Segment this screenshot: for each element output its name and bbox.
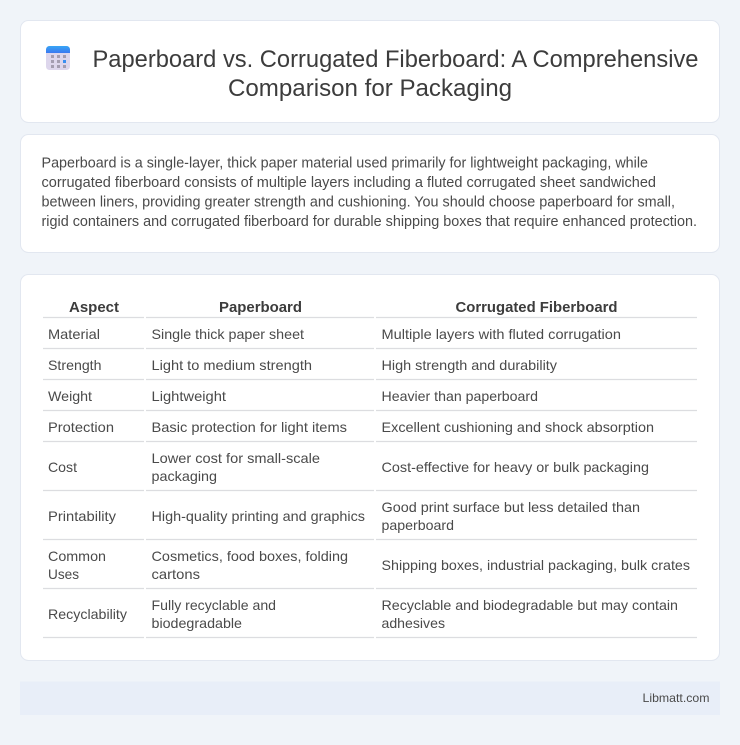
row: weight: Lightweight — [152, 388, 226, 404]
row: material: Material — [48, 326, 100, 342]
title — [92, 46, 698, 102]
row: protection: Basic protection for light items — [152, 419, 347, 435]
panel: summary paragraph: rigid containers and corrugated fiberboard for durable shipping boxes that require enhanced protection. — [42, 214, 697, 230]
row: strength — [48, 357, 557, 373]
row: weight: Weight — [48, 388, 92, 404]
row: common uses: Shipping boxes, industrial packaging, bulk crates — [382, 557, 690, 573]
row: weight: Heavier than paperboard — [382, 388, 538, 404]
icon: calendar — [46, 46, 70, 70]
footer — [20, 682, 720, 715]
row: cost: Cost — [48, 459, 77, 475]
row: recyclability: adhesives — [382, 615, 445, 631]
row: printability — [48, 499, 640, 533]
row: common uses: cartons — [152, 566, 200, 582]
row: common uses: Uses — [48, 566, 79, 582]
row: material — [48, 326, 621, 342]
table header: Corrugated Fiberboard — [456, 300, 618, 316]
row: printability: Good print surface but less detailed than — [382, 499, 640, 515]
footer: Libmatt.com — [642, 691, 710, 705]
panel: summary paragraph: Paperboard is a single-layer, thick paper material used primarily for lightweight packaging, while — [42, 156, 648, 172]
row: printability: Printability — [48, 508, 116, 524]
row: protection: Excellent cushioning and shock absorption — [382, 419, 654, 435]
row: recyclability: Recyclability — [48, 606, 127, 622]
table header: Aspect — [69, 300, 119, 316]
panel: summary paragraph: between liners, providing greater strength and cushioning. You should choose paperboard for small, — [42, 194, 675, 210]
title: Paperboard vs. Corrugated Fiberboard: A Comprehensive — [92, 46, 698, 73]
panel: title card — [20, 20, 720, 122]
panel: comparison table — [20, 274, 720, 660]
row: recyclability: biodegradable — [152, 615, 242, 631]
row: strength: High strength and durability — [382, 357, 557, 373]
panel: summary paragraph: corrugated fiberboard consists of multiple layers including a fluted corrugated sheet sandwiched — [42, 175, 656, 191]
row: strength: Strength — [48, 357, 102, 373]
table header: Paperboard — [219, 300, 302, 316]
row: strength: Light to medium strength — [152, 357, 312, 373]
row: cost: packaging — [152, 468, 217, 484]
row: common uses — [48, 548, 690, 582]
row: common uses: Cosmetics, food boxes, folding — [152, 548, 348, 564]
row: recyclability — [48, 597, 678, 631]
row: common uses: Common — [48, 548, 106, 564]
table header — [69, 300, 618, 316]
row: protection — [48, 419, 654, 435]
row: cost: Lower cost for small-scale — [152, 450, 320, 466]
row: printability: paperboard — [382, 517, 454, 533]
row: recyclability: Recyclable and biodegradable but may contain — [382, 597, 678, 613]
row: material: Single thick paper sheet — [152, 326, 304, 342]
row: weight — [48, 388, 538, 404]
panel: summary paragraph — [20, 134, 720, 252]
row: printability: High-quality printing and graphics — [152, 508, 365, 524]
row: cost: Cost-effective for heavy or bulk packaging — [382, 459, 649, 475]
row: recyclability: Fully recyclable and — [152, 597, 276, 613]
row: material: Multiple layers with fluted corrugation — [382, 326, 621, 342]
title: Comparison for Packaging — [228, 75, 512, 102]
row: cost — [48, 450, 649, 484]
row: protection: Protection — [48, 419, 114, 435]
